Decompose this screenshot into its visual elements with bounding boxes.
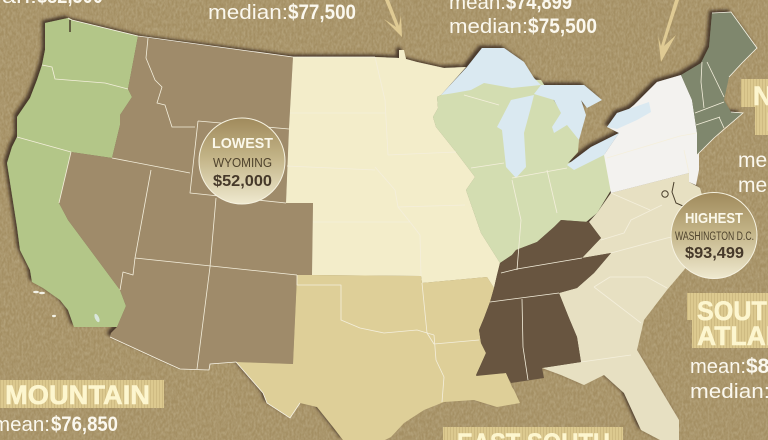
stats: New England (cropped): me xyxy=(738,174,767,197)
arrow: New England pointer xyxy=(658,0,679,62)
stats: South Atlantic (cropped): mean: xyxy=(690,356,746,378)
badge: highest: HIGHEST xyxy=(685,210,743,227)
stats: Mountain xyxy=(0,413,118,436)
region: Mountain xyxy=(59,36,313,370)
stats: New England (cropped) xyxy=(738,149,767,197)
puget sound detail xyxy=(69,20,71,32)
region: West South Central xyxy=(236,275,520,440)
region: East North Central xyxy=(433,78,611,263)
state borders xyxy=(17,38,724,402)
stats: East North Central xyxy=(449,0,597,38)
region: West North Central xyxy=(286,50,500,288)
region: Mid Atlantic xyxy=(604,75,699,193)
region: South Atlantic xyxy=(542,173,712,440)
badge: highest xyxy=(671,192,757,278)
region: East South Central xyxy=(476,220,611,383)
lake: Ontario xyxy=(607,102,651,129)
label: New England xyxy=(741,79,768,137)
stats: Mountain: $76,850 xyxy=(51,413,118,436)
channel islands and salton sea details xyxy=(33,291,101,323)
badge: lowest: $52,000 xyxy=(213,173,272,190)
badge: lowest: LOWEST xyxy=(212,135,273,152)
stats: South Atlantic (cropped): median: xyxy=(690,381,768,403)
region: New England xyxy=(681,12,757,155)
chesapeake bay detail xyxy=(662,182,683,206)
great lakes xyxy=(441,48,651,178)
stats: West North Central: $77,500 xyxy=(288,1,356,24)
lake: Erie xyxy=(567,133,619,170)
label: Mountain: MOUNTAIN xyxy=(5,380,150,410)
lake: Huron xyxy=(534,85,602,140)
stats: East North Central: $75,500 xyxy=(528,15,597,38)
lake: Michigan xyxy=(497,95,534,178)
label: South Atlantic xyxy=(687,293,768,351)
region: Pacific xyxy=(7,18,138,327)
badge: highest: $93,499 xyxy=(685,245,744,262)
badge: lowest: WYOMING xyxy=(213,156,272,170)
stats: Pacific (cropped) xyxy=(2,0,103,8)
stats: New England (cropped): me xyxy=(738,149,767,172)
stats: West North Central: median: xyxy=(208,2,288,24)
badge: lowest xyxy=(199,118,285,204)
stats: West North Central xyxy=(208,1,356,24)
arrow: Midwest pointer xyxy=(384,0,402,37)
stats: South Atlantic (cropped) xyxy=(690,355,768,403)
lake: Superior xyxy=(441,48,541,95)
stats: East North Central: median: xyxy=(449,16,528,38)
